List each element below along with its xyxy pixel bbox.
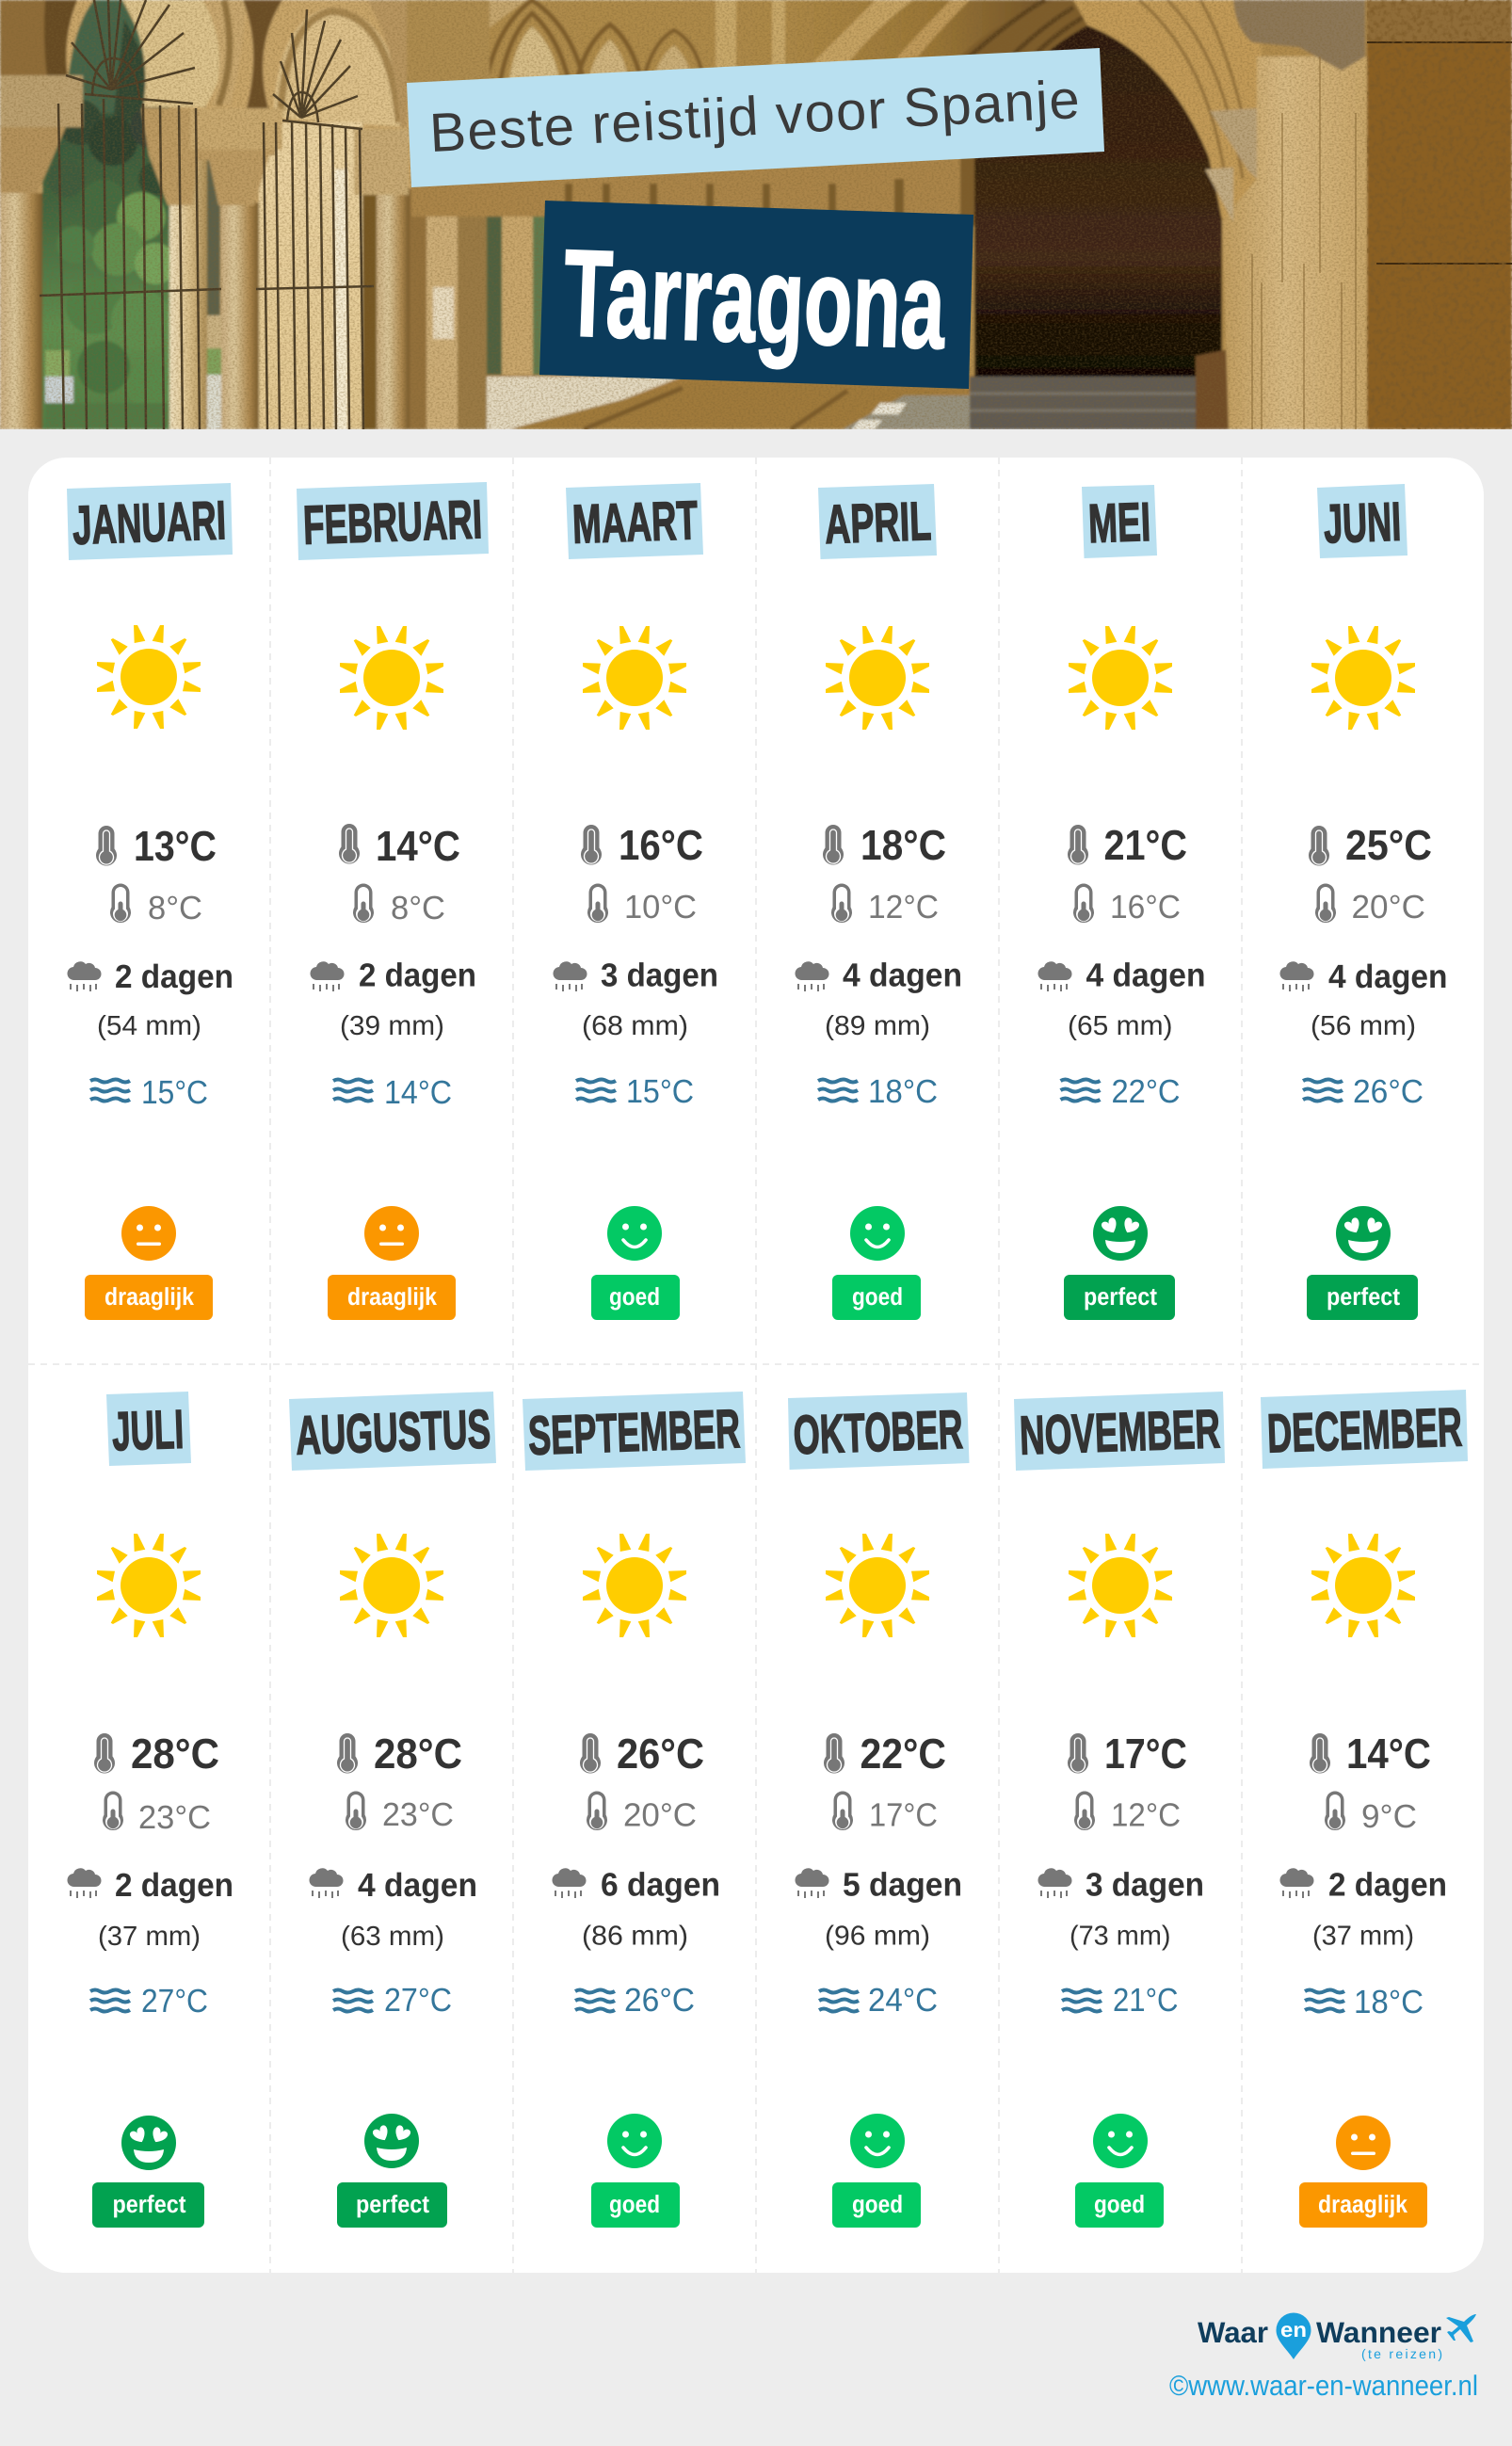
panel: months grid — [28, 458, 1484, 2273]
max temperature: 17°C — [1104, 1730, 1187, 1778]
max temperature — [580, 1730, 704, 1778]
heading: mei: MEI — [1087, 491, 1151, 555]
sea temperature: 15°C — [626, 1073, 694, 1110]
rain days — [552, 1866, 720, 1904]
min temperature — [110, 883, 202, 926]
rain days: 3 dagen — [1086, 1866, 1204, 1904]
max temperature: 18°C — [861, 821, 946, 869]
sea temperature — [1062, 1982, 1179, 2019]
rain days — [795, 1866, 962, 1904]
subtitle banner — [407, 48, 1104, 187]
heading: februari: FEBRUARI — [302, 489, 483, 556]
rainfall: (86 mm) — [582, 1921, 688, 1951]
month: januari — [67, 483, 233, 1320]
max temperature: 26°C — [617, 1730, 704, 1778]
website url: ©www.waar-en-wanneer.nl — [1169, 2371, 1478, 2402]
min temperature: 16°C — [1110, 889, 1181, 925]
sea temperature — [575, 1982, 695, 2019]
icon: sun — [826, 1534, 929, 1637]
rain days — [1279, 958, 1448, 995]
rating: goed: goed — [1094, 2190, 1145, 2218]
min temperature: 9°C — [1361, 1798, 1417, 1835]
sea temperature — [1060, 1073, 1181, 1110]
sea temperature: 27°C — [384, 1982, 452, 2019]
max temperature — [339, 822, 460, 870]
rating: draaglijk: draaglijk — [347, 1282, 437, 1311]
rating: perfect: perfect — [1084, 1282, 1157, 1311]
rain days — [67, 958, 233, 995]
tagline: (te reizen) — [1361, 2346, 1442, 2361]
month: maart — [553, 483, 718, 1320]
heading: juli — [106, 1392, 191, 1466]
max temperature: 14°C — [376, 822, 460, 870]
min temperature — [346, 1791, 454, 1833]
heading: november: NOVEMBER — [1019, 1398, 1221, 1467]
max temperature: 21°C — [1103, 821, 1187, 869]
heading: oktober: OKTOBER — [793, 1399, 964, 1466]
heading: januari: JANUARI — [72, 490, 227, 556]
min temperature — [1073, 883, 1181, 925]
heading: maart: MAART — [571, 490, 699, 555]
min temperature: 23°C — [138, 1799, 211, 1836]
rating: draaglijk — [1299, 2116, 1427, 2228]
min temperature — [587, 1791, 697, 1834]
icon: sun — [1069, 1534, 1172, 1637]
heading: juni — [1317, 484, 1407, 558]
min temperature: 8°C — [391, 890, 445, 926]
rainfall: (37 mm) — [1312, 1921, 1414, 1951]
wordmark: Wanneer: Wanneer — [1316, 2316, 1441, 2349]
rainfall: (96 mm) — [825, 1921, 930, 1951]
rating: goed — [832, 1206, 921, 1320]
sea temperature: 26°C — [624, 1982, 695, 2019]
min temperature: 23°C — [382, 1796, 454, 1833]
min temperature: 8°C — [148, 890, 202, 926]
sea temperature: 27°C — [141, 1983, 208, 2020]
icon: plane — [1446, 2314, 1476, 2342]
rain days — [310, 957, 476, 994]
sea temperature: 24°C — [868, 1982, 938, 2019]
month: juli — [67, 1392, 233, 2228]
rain days: 4 dagen — [358, 1867, 477, 1904]
icon: sun — [340, 1534, 443, 1637]
logo: Waar en Wanneer — [1198, 2312, 1476, 2361]
rain days — [1279, 1866, 1447, 1904]
sea temperature — [818, 1073, 938, 1110]
rainfall: (54 mm) — [97, 1011, 201, 1041]
max temperature: 22°C — [861, 1730, 946, 1778]
min temperature: 10°C — [624, 889, 697, 925]
max temperature: 28°C — [131, 1730, 219, 1778]
sea temperature: 18°C — [868, 1073, 938, 1110]
rating: goed: goed — [609, 2190, 660, 2218]
rain days — [67, 1867, 233, 1904]
min temperature: 17°C — [869, 1796, 938, 1834]
header photo: cloister — [0, 0, 1512, 429]
rainfall: (39 mm) — [340, 1011, 444, 1041]
sea temperature — [333, 1982, 452, 2019]
min temperature: 12°C — [1111, 1796, 1181, 1834]
rating: perfect — [337, 2114, 447, 2228]
min temperature — [353, 883, 445, 926]
heading: november — [1014, 1392, 1225, 1471]
sea temperature — [90, 1074, 208, 1111]
month: juni — [1279, 484, 1448, 1320]
heading: mei — [1082, 485, 1157, 558]
min temperature — [1315, 883, 1425, 925]
heading: september — [523, 1392, 746, 1471]
rating: draaglijk — [85, 1206, 213, 1320]
rating: draaglijk: draaglijk — [105, 1282, 194, 1311]
rating: goed — [591, 1206, 680, 1320]
rating: goed: goed — [609, 1282, 660, 1311]
icon: sun — [1311, 1534, 1415, 1637]
max temperature — [581, 821, 703, 869]
rating: perfect — [1307, 1206, 1418, 1320]
icon: sun — [97, 1534, 201, 1637]
icon: sun — [826, 626, 929, 730]
min temperature — [1325, 1791, 1417, 1835]
rating: perfect: perfect — [113, 2190, 186, 2218]
rain days: 2 dagen — [359, 957, 476, 994]
rainfall: (37 mm) — [98, 1922, 201, 1952]
max temperature: 16°C — [619, 821, 703, 869]
rain days — [553, 957, 718, 994]
rain days: 2 dagen — [115, 1867, 233, 1904]
min temperature — [832, 1791, 938, 1834]
max temperature — [94, 1730, 219, 1778]
rain days: 5 dagen — [843, 1866, 962, 1904]
rain days: 4 dagen — [1086, 957, 1205, 994]
rating: perfect — [1064, 1206, 1175, 1320]
rainfall: (73 mm) — [1070, 1921, 1171, 1951]
rating: goed: goed — [852, 1282, 903, 1311]
rain days: 2 dagen — [1328, 1866, 1447, 1904]
sea temperature — [1303, 1073, 1424, 1110]
rain days: 2 dagen — [115, 958, 233, 995]
icon: sun — [1069, 626, 1172, 730]
rating: goed — [591, 2114, 680, 2228]
max temperature: 25°C — [1345, 821, 1432, 869]
min temperature — [587, 883, 697, 925]
rain days — [1037, 1866, 1204, 1904]
heading: februari — [297, 482, 489, 560]
month: april — [795, 484, 962, 1320]
icon: sun — [340, 626, 443, 730]
rating: perfect: perfect — [356, 2190, 429, 2218]
sea temperature: 15°C — [141, 1074, 208, 1111]
rain days: 4 dagen — [843, 957, 962, 994]
heading: september: SEPTEMBER — [527, 1398, 741, 1467]
rating: goed — [832, 2114, 921, 2228]
icon: map pin — [1277, 2312, 1311, 2359]
rating: perfect — [92, 2116, 204, 2228]
min temperature: 20°C — [1352, 889, 1425, 925]
rainfall: (68 mm) — [582, 1011, 688, 1041]
sea temperature: 22°C — [1111, 1073, 1181, 1110]
min temperature — [1074, 1791, 1181, 1834]
heading: januari — [67, 483, 233, 560]
heading: augustus: AUGUSTUS — [295, 1398, 491, 1467]
rain days: 3 dagen — [601, 957, 718, 994]
sea temperature: 18°C — [1354, 1984, 1424, 2020]
month: mei — [1037, 485, 1205, 1320]
max temperature — [823, 821, 946, 869]
rain days — [795, 957, 962, 994]
rating: draaglijk — [328, 1206, 456, 1320]
rating: goed — [1075, 2114, 1164, 2228]
sea temperature — [90, 1983, 208, 2020]
month: oktober — [788, 1392, 970, 2228]
rainfall: (89 mm) — [825, 1011, 930, 1041]
max temperature — [96, 822, 217, 870]
max temperature — [1068, 1730, 1187, 1778]
sea temperature: 14°C — [384, 1074, 452, 1111]
min temperature — [103, 1791, 211, 1836]
heading: april — [818, 484, 937, 559]
month: februari — [297, 482, 489, 1320]
max temperature — [1309, 821, 1432, 869]
pin label: en — [1280, 2318, 1307, 2341]
logo: Waar en Wanneer: Waar — [1198, 2316, 1268, 2349]
sea temperature — [819, 1982, 938, 2019]
rain days — [309, 1867, 477, 1904]
rating: perfect: perfect — [1327, 1282, 1400, 1311]
rainfall: (63 mm) — [341, 1922, 444, 1952]
rating: goed: goed — [852, 2190, 903, 2218]
month: september — [523, 1392, 746, 2228]
subtitle banner: Beste reistijd voor Spanje — [428, 69, 1081, 164]
rainfall: (56 mm) — [1311, 1011, 1416, 1041]
title banner: Tarragona — [539, 201, 973, 389]
heading: maart — [566, 483, 703, 559]
rain days: 4 dagen — [1328, 958, 1448, 995]
heading: oktober — [788, 1392, 970, 1470]
max temperature — [824, 1730, 946, 1778]
max temperature: 28°C — [374, 1730, 462, 1778]
title banner: Tarragona: Tarragona — [561, 223, 948, 375]
icon: sun — [583, 626, 686, 730]
max temperature — [337, 1730, 462, 1778]
heading: augustus — [289, 1392, 496, 1471]
sea temperature — [576, 1073, 694, 1110]
icon: sun — [97, 625, 201, 729]
rain days: 6 dagen — [601, 1866, 720, 1904]
icon: sun — [583, 1534, 686, 1637]
sea temperature: 26°C — [1353, 1073, 1424, 1110]
rain days — [1037, 957, 1205, 994]
rating: draaglijk: draaglijk — [1318, 2190, 1407, 2218]
icon: sun — [1311, 626, 1415, 730]
month: november — [1014, 1392, 1225, 2228]
max temperature — [1310, 1730, 1431, 1778]
rainfall: (65 mm) — [1068, 1011, 1173, 1041]
max temperature — [1068, 821, 1187, 869]
heading: april: APRIL — [824, 491, 932, 555]
min temperature: 20°C — [623, 1796, 697, 1834]
sea temperature — [1305, 1984, 1424, 2020]
month: augustus — [289, 1392, 496, 2228]
month: december — [1261, 1390, 1468, 2228]
max temperature: 13°C — [134, 822, 217, 870]
max temperature: 14°C — [1346, 1730, 1431, 1778]
min temperature: 12°C — [868, 889, 939, 925]
heading: juni: JUNI — [1323, 491, 1402, 555]
min temperature — [831, 883, 939, 925]
heading: juli: JULI — [111, 1399, 185, 1462]
sea temperature — [333, 1074, 452, 1111]
sea temperature: 21°C — [1113, 1982, 1179, 2019]
